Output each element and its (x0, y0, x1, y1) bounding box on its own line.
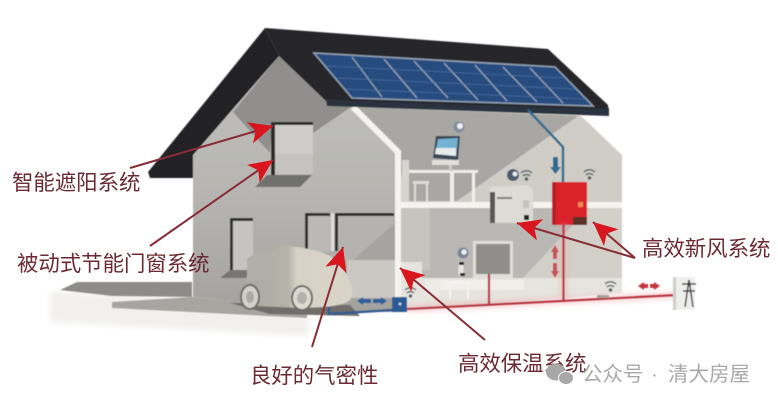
television (473, 241, 513, 278)
blue conduit from solar panels (528, 110, 563, 183)
arrow: ventilation to inverter (517, 223, 635, 258)
lower room furniture (401, 262, 471, 299)
arrow: smart shading (130, 126, 273, 168)
label: insulation: 高效保温系统 (458, 352, 586, 376)
car (241, 245, 352, 310)
red power line glow (407, 224, 677, 309)
red double arrow to grid (638, 282, 660, 290)
red power lines (407, 224, 677, 309)
label: smart shading: 智能遮阳系统 (12, 171, 140, 195)
label: passive doors and windows: 被动式节能门窗系统 (17, 252, 210, 276)
interior back wall (340, 100, 622, 311)
blue down arrow (550, 157, 561, 174)
wifi icon lower left (405, 288, 416, 297)
label: airtightness: 良好的气密性 (250, 364, 378, 388)
roof fascia (326, 99, 609, 116)
roof right slope (265, 28, 609, 115)
arrow: airtightness (312, 247, 343, 347)
arrow: ventilation to red box (593, 222, 635, 258)
house cast shadow (60, 282, 192, 297)
tv console (427, 280, 524, 290)
watermark icon (546, 364, 574, 384)
solar panels (314, 53, 593, 106)
watermark text: · (651, 363, 658, 386)
upper room globe icon (454, 117, 528, 132)
wifi icon lower right (597, 282, 616, 298)
upper window with shading blind (255, 122, 313, 187)
floor slab (398, 202, 622, 208)
interior upper shadow (353, 107, 578, 201)
faint ground (50, 292, 310, 336)
blue double arrow (357, 297, 387, 305)
watermark text: 公众号 (582, 363, 644, 386)
blue air duct (329, 297, 407, 314)
arrow: passive windows (150, 160, 273, 246)
wall shadow under roof (233, 56, 351, 153)
upper room desk and chair (402, 160, 478, 202)
wifi icon upper right (584, 170, 595, 179)
label: fresh air system: 高效新风系统 (642, 237, 770, 261)
lower right window with stairs (305, 213, 395, 298)
red up and down arrows (551, 245, 559, 278)
house illustration (50, 28, 696, 336)
lower left window (220, 218, 254, 278)
inverter unit (490, 185, 533, 223)
wifi icon upper left (521, 171, 532, 180)
arrow: insulation (400, 268, 485, 340)
lower room left wall (401, 207, 430, 270)
roof left slope (148, 28, 279, 178)
computer monitor (432, 136, 460, 171)
lower room wall (405, 207, 590, 278)
front wall (193, 56, 398, 312)
ground slab (112, 297, 320, 318)
lower room floor (402, 278, 622, 311)
grid pylon box (673, 277, 696, 310)
red control box (552, 182, 587, 225)
car shadow (230, 303, 360, 316)
lower room globe and device (458, 248, 468, 276)
lower room sunlit wall (523, 207, 622, 293)
watermark text: 清大房屋 (668, 363, 750, 386)
wall cut edge (353, 107, 398, 300)
globe icon on inverter (507, 169, 519, 181)
